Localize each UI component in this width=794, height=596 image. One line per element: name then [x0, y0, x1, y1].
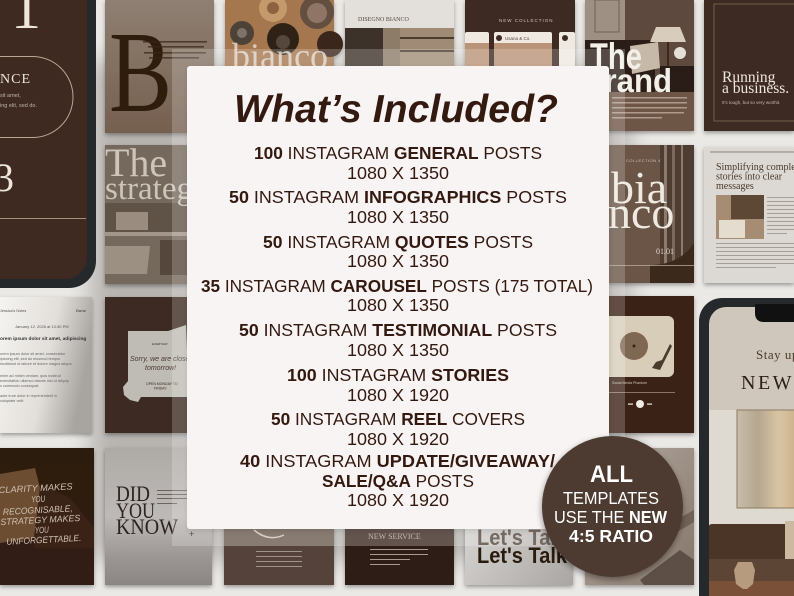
badge line use the new: USE THE NEW	[554, 507, 667, 527]
list item: carousel posts	[201, 276, 593, 315]
chalk text: UNFORGETTABLE.	[6, 533, 82, 547]
post: handwritten note	[105, 297, 214, 433]
chalk text: YOU	[31, 494, 46, 504]
list item: carousel posts: 1080 X 1350	[347, 295, 449, 315]
list item: stories	[287, 365, 509, 405]
list item: update giveaway sale posts: 1080 X 1920	[347, 490, 449, 510]
heading line two: stories into clear	[716, 172, 783, 182]
list item: quotes posts: 1080 X 1350	[347, 251, 449, 271]
list item: update giveaway sale posts: 40 INSTAGRAM UPDATE/GIVEAWAY/	[240, 451, 555, 471]
heading	[116, 481, 178, 539]
card label: Usana & Co.	[505, 36, 531, 41]
heading line three: messages	[716, 181, 754, 192]
list item: general posts	[254, 143, 542, 183]
post: simplifying complex stories	[704, 147, 794, 283]
list item: quotes posts	[263, 232, 533, 271]
header label: Jessica's Notes	[0, 309, 26, 313]
list item: testimonial posts	[239, 320, 557, 360]
word nco: nco	[608, 187, 674, 238]
post: the strategy	[105, 140, 215, 284]
chalk text: RECOGNISABLE,	[3, 503, 73, 517]
panel: what's included	[187, 66, 609, 529]
photo	[716, 195, 764, 239]
heading strategy: strategy	[105, 171, 210, 207]
list item: stories: 100 INSTAGRAM STORIES	[287, 365, 509, 385]
post: running a business	[704, 0, 794, 131]
heading The: The	[105, 140, 167, 185]
list item: infographics posts: 1080 X 1350	[347, 207, 449, 227]
note body: voluptate velit.	[0, 399, 24, 403]
small text lines	[157, 490, 187, 504]
phone mockup: right	[699, 298, 794, 596]
post label: DISEGNO BIANCO	[358, 17, 410, 23]
chalk text	[0, 481, 82, 547]
note title: orem ipsum dolor sit amet, adipiscing	[0, 336, 86, 342]
note body: orem ipsum dolor sit amet, consectetur	[0, 352, 66, 356]
list item: update giveaway sale posts	[240, 451, 555, 510]
play button	[628, 400, 652, 408]
track title: Social Media Phantom	[612, 381, 647, 385]
list item: quotes posts: 50 INSTAGRAM QUOTES POSTS	[263, 232, 533, 252]
heading: DID	[116, 481, 150, 506]
title: What’s Included?	[234, 88, 558, 131]
phone screen: body text fragment two: ing elit, sed do.	[0, 103, 37, 109]
note body: exercitation ullamco laboris nisi ut aliquip	[0, 379, 69, 383]
list item: general posts: 1080 X 1350	[347, 163, 449, 183]
post: clarity chalk text	[0, 448, 94, 585]
badge line ratio: 4:5 RATIO	[569, 526, 653, 546]
list item: stories: 1080 X 1920	[347, 385, 449, 405]
chalk text: CLARITY MAKES	[0, 481, 73, 495]
word bia: bia	[611, 162, 667, 213]
list item: update giveaway sale posts: SALE/Q&A POSTS	[322, 471, 474, 491]
list item: reel covers: 1080 X 1920	[347, 429, 449, 449]
list item: infographics posts: 50 INSTAGRAM INFOGRAPHICS POSTS	[229, 187, 567, 207]
label: NEW COLLECTION	[499, 18, 554, 23]
plus icon: +	[189, 529, 194, 539]
post: disegno bianco	[345, 0, 454, 133]
note body	[0, 352, 72, 403]
word The: The	[590, 36, 642, 77]
post: quote dark	[224, 448, 334, 585]
phone screen: arch outline	[0, 56, 73, 138]
date: January 12, 2026 at 10:30 PM	[15, 324, 69, 329]
heading repeat: Let's Talk	[477, 543, 568, 568]
post: bianco 01.01	[585, 145, 694, 283]
translucent overlay behind panel	[172, 49, 625, 546]
list item: general posts: 100 INSTAGRAM GENERAL POSTS	[254, 143, 542, 163]
subtext: It's tough, but so very worthit.	[722, 100, 780, 105]
heading line two: a business.	[722, 80, 789, 97]
soft shadow behind central area	[90, 60, 630, 560]
heading: KNOW	[116, 514, 178, 539]
label: NEW SERVICE	[368, 532, 421, 541]
notch	[755, 304, 794, 322]
post: new collection	[465, 0, 575, 133]
chalk text: STRATEGY MAKES	[0, 513, 80, 527]
list item: infographics posts	[229, 187, 567, 227]
post text lines	[143, 41, 207, 59]
word Brand: Brand	[582, 62, 672, 99]
list item: reel covers: 50 INSTAGRAM REEL COVERS	[271, 409, 525, 429]
note footer line two: FRIDAY	[154, 386, 167, 390]
room photo	[709, 410, 794, 596]
post: new service	[345, 448, 454, 585]
note body: enim ad minim veniam, quis nostrud	[0, 374, 61, 378]
circle badge shadow	[541, 438, 683, 580]
chalk text: YOU	[35, 525, 49, 535]
number: 01.01	[656, 247, 674, 256]
post: big B	[105, 0, 214, 137]
post text lines	[716, 197, 794, 268]
phone screen: heading fragment: NCE	[0, 72, 31, 87]
note footer: OPEN MONDAY TO	[146, 382, 178, 386]
badge line templates: TEMPLATES	[563, 488, 659, 508]
post: the brand	[582, 0, 694, 131]
letter B: B	[109, 9, 172, 137]
post: did you know	[105, 448, 212, 585]
handwriting: Sorry, we are closed	[130, 356, 194, 363]
vinyl	[620, 332, 648, 360]
note body: incididunt ut labore et dolore magna aliqua	[0, 362, 72, 366]
note body: ipiscing elit, sed do eiusmod tempor	[0, 357, 61, 361]
collection label: COLLECTION 4	[626, 158, 661, 163]
note body: aute irure dolor in reprehenderit in	[0, 394, 57, 398]
list item: reel covers	[271, 409, 525, 449]
heading: YOU	[116, 498, 155, 523]
done label: Done	[76, 308, 87, 313]
phone screen: body text fragment: sit amet,	[0, 93, 21, 99]
note body: x commodo consequat.	[0, 384, 39, 388]
post: notes app	[0, 297, 92, 433]
heading: Let's Talk	[477, 525, 568, 550]
list item: testimonial posts: 50 INSTAGRAM TESTIMONIAL POSTS	[239, 320, 557, 340]
panel shadow	[188, 68, 610, 531]
note heading: EVERYDAY	[152, 342, 168, 346]
post: desk photo	[585, 448, 694, 585]
quote mark tail	[254, 530, 284, 538]
post: let's talk	[465, 448, 573, 585]
bianco word: bianco	[232, 36, 328, 76]
handwriting line two: tomorrow!	[145, 365, 176, 372]
list item: carousel posts: 35 INSTAGRAM CAROUSEL POSTS (175 TOTAL)	[201, 276, 593, 296]
phone text: new: NEW	[741, 372, 794, 394]
badge: all templates 4:5 ratio	[542, 436, 683, 577]
post: bianco photo	[225, 0, 343, 133]
heading: Running	[722, 69, 776, 86]
phone mockup: left	[0, 0, 96, 288]
list item: testimonial posts: 1080 X 1350	[347, 340, 449, 360]
badge word ALL: ALL	[590, 461, 633, 488]
post: music player	[585, 296, 694, 433]
post text lines	[612, 97, 687, 118]
